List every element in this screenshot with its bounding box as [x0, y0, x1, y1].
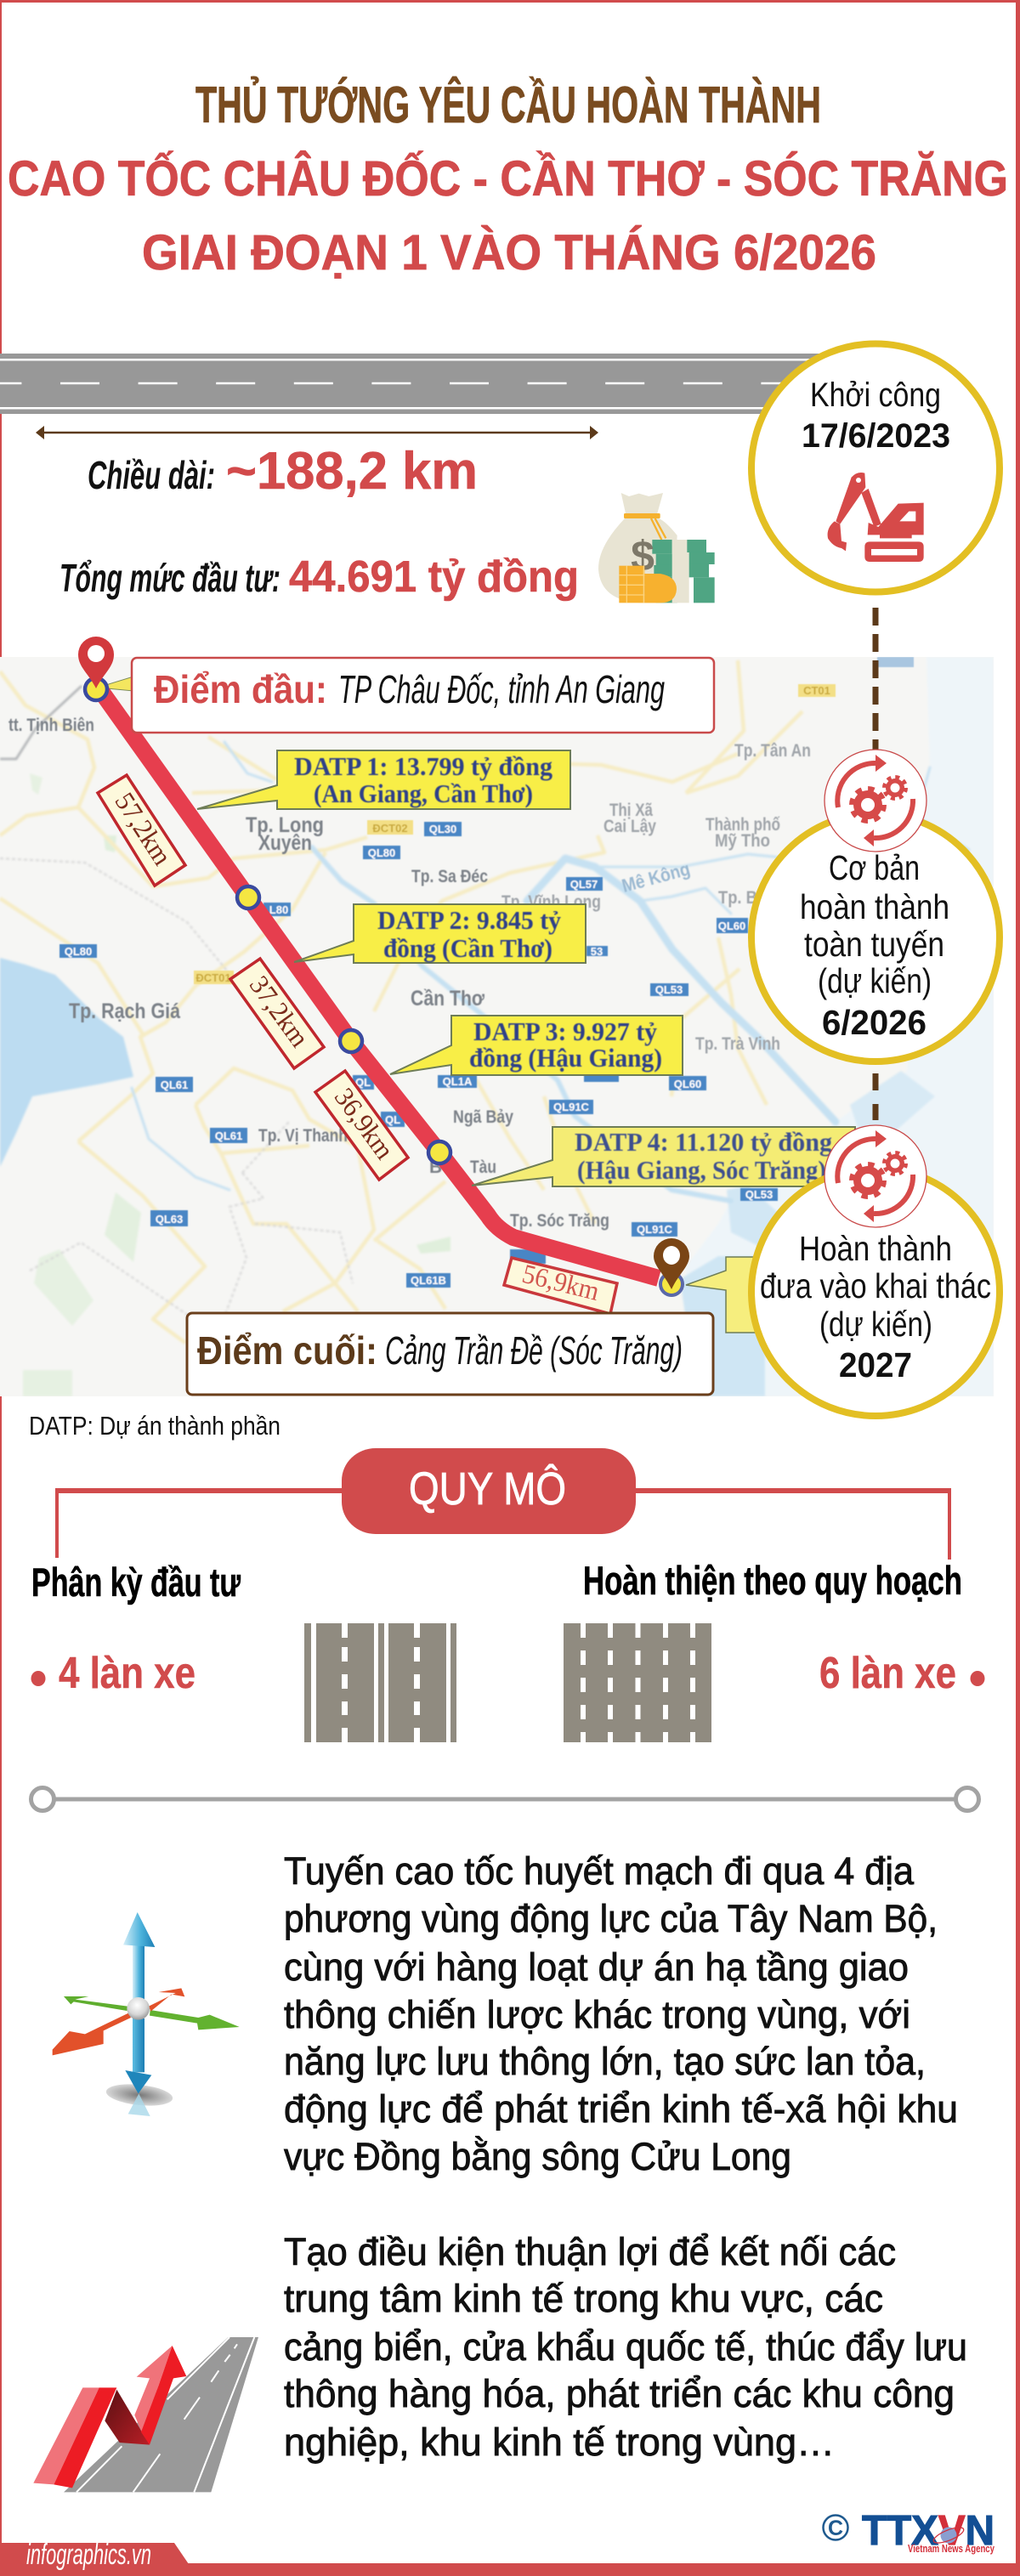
route node 1	[237, 886, 259, 909]
start point label: TP Châu Đốc, tỉnh An Giang	[338, 667, 665, 711]
map road badges: QL53	[745, 1188, 773, 1201]
panel: scale	[31, 1448, 984, 1742]
map road badges: QL30	[429, 823, 456, 835]
callout: DATP 3	[390, 1016, 683, 1075]
start point label	[132, 658, 714, 733]
map place labels: Tp. Vĩnh Long	[502, 892, 601, 912]
route distance tag 36,9km: 36,9km	[329, 1082, 400, 1165]
map road badges: QL	[355, 1076, 371, 1089]
route distance tag 37,2km: 37,2km	[244, 970, 315, 1053]
end point label	[187, 1313, 713, 1395]
map place labels: Cần Thơ	[411, 987, 484, 1011]
footer bar	[0, 2539, 1020, 2576]
callout: start point pointer	[98, 677, 133, 691]
route distance tag 56,9km: 56,9km	[519, 1258, 603, 1306]
length stat: ~188,2 km	[226, 442, 478, 501]
milestone: operation: Hoàn thành	[799, 1229, 952, 1268]
milestone: main completion: hoàn thành	[800, 887, 949, 926]
text block: first paragraph: cùng với hàng loạt dự án hạ tầng giao	[284, 1945, 909, 1989]
callout: DATP 3: đồng (Hậu Giang)	[469, 1043, 662, 1073]
text block: second paragraph: cảng biển, cửa khẩu quốc tế, thúc đẩy lưu	[284, 2325, 967, 2369]
milestone: main completion	[751, 813, 1000, 1062]
map place labels: Tp. Long	[246, 813, 324, 837]
map place labels	[8, 716, 811, 1231]
text block: first paragraph: năng lực lưu thông lớn, tạo sức lan tỏa,	[284, 2040, 926, 2083]
route node 2	[340, 1030, 362, 1052]
callout: DATP 1: DATP 1: 13.799 tỷ đồng	[294, 751, 552, 781]
start point label: Điểm đầu:	[154, 667, 327, 711]
milestone: main completion: 6/2026	[822, 1003, 926, 1042]
callout: DATP 4: DATP 4: 11.120 tỷ đồng	[575, 1127, 832, 1157]
icon: money bag	[598, 493, 715, 603]
logo: TTXVN: C	[828, 2517, 843, 2540]
timeline dashed connector	[872, 608, 879, 1120]
text block: second paragraph: trung tâm kinh tế trong khu vực, các	[284, 2277, 883, 2320]
icon: compass arrows	[53, 1912, 240, 2116]
phase label: Phân kỳ đầu tư	[31, 1560, 241, 1605]
map place labels: tt. Tịnh Biên	[8, 716, 94, 735]
end point label: Điểm cuối:	[197, 1328, 377, 1373]
callout: DATP 2: DATP 2: 9.845 tỷ	[377, 905, 561, 935]
panel: route map	[0, 637, 994, 1396]
callout: DATP 1	[197, 750, 570, 809]
length stat	[88, 442, 478, 501]
text block: second paragraph: Tạo điều kiện thuận lợi để kết nối các	[284, 2230, 896, 2273]
map place labels: Tàu	[470, 1158, 496, 1177]
icon: six lane road	[564, 1623, 711, 1742]
map road badges: QL60	[674, 1078, 701, 1090]
callout: DATP 2: đồng (Cần Thơ)	[383, 933, 552, 963]
milestone: start of construction: 17/6/2023	[802, 417, 950, 455]
heading pill: QUY MÔ	[409, 1464, 566, 1514]
map place labels: Tp. Tân An	[734, 741, 811, 761]
map road badges: QL91C	[553, 1101, 590, 1113]
map place labels: Xuyên	[258, 831, 312, 855]
map road badges: QL61	[161, 1079, 188, 1091]
map road badges: QL1A	[443, 1075, 473, 1088]
route distance tag 57,2km	[98, 775, 185, 886]
end point label: Cảng Trần Đề (Sóc Trăng)	[385, 1328, 683, 1373]
milestone: start of construction	[751, 343, 1000, 592]
milestone: operation	[751, 1168, 1000, 1416]
road banner	[0, 354, 850, 414]
investment stat: 44.691 tỷ đồng	[289, 552, 579, 602]
map place labels: Tp. Vị Thanh	[258, 1126, 348, 1146]
start marker	[85, 678, 107, 700]
route distance tag 57,2km: 57,2km	[109, 787, 178, 870]
callout: DATP 3: DATP 3: 9.927 tỷ	[473, 1016, 657, 1046]
map road badges: QL80	[65, 945, 92, 958]
map road badges: QL57	[570, 878, 598, 891]
route distance tag 37,2km	[230, 959, 324, 1068]
map road badges: QL61	[215, 1129, 242, 1142]
milestone: start of construction: Khởi công	[810, 376, 941, 414]
text block: second paragraph	[284, 2230, 967, 2464]
title: GIAI ĐOẠN 1 VÀO THÁNG 6/2026	[142, 225, 876, 280]
map road badges	[60, 657, 914, 1288]
callout: DATP 4	[472, 1127, 855, 1186]
route distance tag 56,9km	[504, 1258, 617, 1314]
map place labels: Cai Lậy	[604, 817, 656, 836]
map place labels: Thị Xã	[609, 801, 653, 820]
icon: road with rising arrow	[33, 2337, 258, 2492]
scale connector lines	[55, 1488, 951, 1560]
map place labels: Mỹ Tho	[715, 831, 770, 851]
logo: TTXVN: TTXVN	[862, 2508, 994, 2554]
map place labels: Tp. Bến Tre	[718, 888, 803, 908]
map place labels: Tp. Sa Đéc	[411, 867, 488, 886]
map road badges: QL	[385, 1113, 400, 1126]
icon: four lane road	[304, 1623, 456, 1742]
milestone: operation: 2027	[839, 1345, 912, 1384]
length stat: Chiều dài:	[88, 453, 215, 497]
text block: second paragraph: thông hàng hóa, phát triển các khu công	[284, 2372, 955, 2415]
icon: gears badge 2	[824, 1125, 926, 1227]
text block: first paragraph: Tuyến cao tốc huyết mạch đi qua 4 địa	[284, 1849, 915, 1893]
route node 3	[428, 1141, 450, 1163]
map place labels: Thành phố	[706, 815, 780, 835]
map road badges: CT01	[803, 684, 830, 697]
map road badges: QL63	[156, 1213, 183, 1226]
milestone: main completion: toàn tuyến	[804, 925, 944, 964]
title	[8, 76, 1008, 280]
callout: DATP 4: (Hậu Giang, Sóc Trăng)	[577, 1155, 826, 1185]
route distance tag 36,9km	[315, 1071, 408, 1180]
milestone: operation: (dự kiến)	[819, 1305, 932, 1344]
map background	[0, 657, 994, 1396]
section divider	[31, 1788, 979, 1810]
icon: money bag: $	[631, 533, 654, 580]
end marker	[660, 1273, 683, 1295]
icon: gears badge 1	[824, 750, 926, 852]
map place labels: Tp. Sóc Trăng	[510, 1211, 609, 1231]
icon: end pin	[654, 1238, 689, 1289]
map road badges: L80	[269, 903, 288, 916]
map road badges: ĐCT01	[196, 971, 231, 984]
callout: end point pointer	[686, 1257, 765, 1333]
four lanes: 4 làn xe	[59, 1649, 196, 1698]
map place labels: Mê Kông	[620, 858, 692, 897]
DATP note: DATP: Dự án thành phần	[29, 1411, 280, 1441]
map road badges: QL53	[655, 983, 683, 996]
text block: first paragraph: vực Đồng bằng sông Cửu Long	[284, 2135, 791, 2178]
length arrow	[36, 426, 598, 439]
callout: DATP 2	[294, 904, 586, 963]
text block: second paragraph: nghiệp, khu kinh tế trong vùng…	[284, 2420, 835, 2464]
footer bar: infographics.vn	[26, 2539, 151, 2571]
text block: first paragraph	[284, 1849, 958, 2178]
text block: first paragraph: động lực để phát triển kinh tế-xã hội khu	[284, 2087, 958, 2131]
map road badges: ĐCT02	[372, 822, 408, 835]
map road badges: 53	[591, 945, 603, 958]
map road badges: QL61B	[411, 1274, 446, 1287]
map road badges: QL91C	[637, 1223, 673, 1236]
map place labels: Ngã Bảy	[453, 1107, 513, 1127]
milestone: main completion: Cơ bản	[829, 848, 920, 887]
text block: first paragraph: phương vùng động lực của Tây Nam Bộ,	[284, 1897, 938, 1940]
milestone: main completion: (dự kiến)	[818, 961, 932, 1000]
heading pill	[342, 1448, 636, 1534]
map place labels: Tp. Trà Vinh	[695, 1034, 780, 1054]
six lanes: 6 làn xe	[819, 1649, 956, 1698]
map road badges: QL80	[368, 846, 395, 859]
route line	[100, 690, 659, 1278]
icon: start pin	[78, 637, 114, 688]
map place labels: Tp. Rạch Giá	[69, 999, 180, 1023]
map place labels: B	[429, 1158, 442, 1177]
text block: first paragraph: thông chiến lược khác trong vùng, với	[284, 1993, 910, 2036]
investment stat	[60, 552, 579, 602]
icon: excavator	[828, 473, 924, 562]
map road badges: QL60	[718, 920, 745, 932]
investment stat: Tổng mức đầu tư:	[60, 556, 280, 600]
callout: DATP 1: (An Giang, Cần Thơ)	[314, 778, 533, 808]
